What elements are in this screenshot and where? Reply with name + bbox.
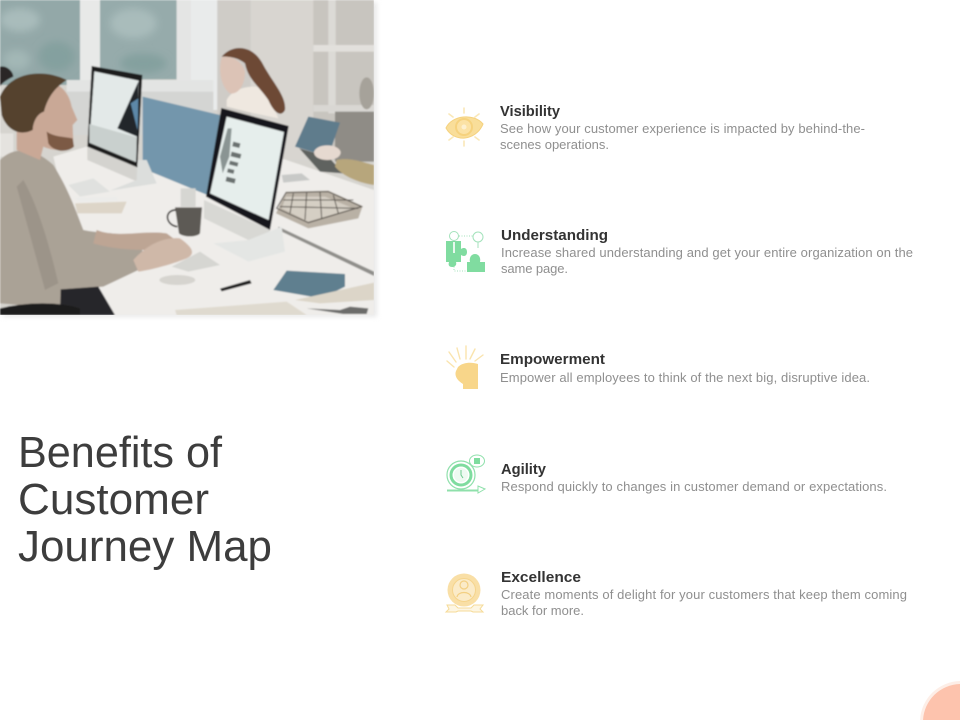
heading: Excellence: Excellence bbox=[501, 570, 581, 586]
right monitor bbox=[206, 108, 289, 230]
description: Understanding bbox=[501, 245, 913, 276]
right monitor stand bbox=[204, 200, 270, 240]
icon: award badge with ribbon bbox=[446, 574, 483, 612]
monitor left bbox=[87, 147, 137, 182]
description: Excellence: back for more. bbox=[501, 603, 584, 618]
heading: Understanding: Understanding bbox=[501, 228, 608, 244]
man's trousers and chair bbox=[60, 287, 115, 315]
desk surfaces bbox=[53, 147, 374, 315]
title: Customer bbox=[18, 475, 209, 524]
heading: Agility: Agility bbox=[501, 462, 546, 478]
man's torso bbox=[0, 151, 143, 308]
icon: raised fist with rays bbox=[447, 346, 483, 389]
description: Visibility: See how your customer experience is impacted by behind-the- bbox=[500, 121, 865, 136]
description: Excellence bbox=[501, 587, 907, 618]
man's head bbox=[17, 82, 77, 160]
icon: puzzle pieces with person and light bulb bbox=[446, 232, 485, 272]
decorative corner circle bbox=[920, 681, 960, 720]
description: Empowerment: Empower all employees to think of the next big, disruptive idea. bbox=[500, 370, 870, 385]
item: Visibility bbox=[446, 104, 865, 152]
left keyboard and notebooks bbox=[70, 179, 108, 196]
item: Understanding bbox=[446, 228, 913, 276]
title: Journey Map bbox=[18, 522, 272, 571]
item: Empowerment bbox=[447, 346, 870, 389]
desk items: pen, notebook, paper bbox=[220, 280, 252, 291]
description: Excellence: Create moments of delight for your customers that keep them coming bbox=[501, 587, 907, 602]
heading: Visibility: Visibility bbox=[500, 104, 560, 120]
title bbox=[18, 428, 272, 571]
arms and hand bbox=[93, 230, 173, 250]
heading: Empowerment: Empowerment bbox=[500, 352, 605, 368]
item: Excellence bbox=[446, 570, 907, 618]
description: Agility: Respond quickly to changes in customer demand or expectations. bbox=[501, 479, 887, 494]
blue partition bbox=[143, 97, 220, 195]
description: Understanding: same page. bbox=[501, 261, 568, 276]
description: Visibility: scenes operations. bbox=[500, 137, 609, 152]
title: Benefits of bbox=[18, 428, 223, 477]
tablet and right person bbox=[295, 117, 340, 157]
wire basket bbox=[276, 191, 363, 228]
item: Agility bbox=[447, 455, 887, 494]
description: Understanding: Increase shared understanding and get your entire organization on the bbox=[501, 245, 913, 260]
description: Visibility bbox=[500, 121, 865, 152]
woman in background bbox=[227, 87, 278, 118]
photo: office workers at computer desks bbox=[0, 0, 377, 317]
mug bbox=[181, 188, 196, 207]
icon: clock with arrow and speech bubble bbox=[447, 455, 485, 493]
icon: eye with rays bbox=[446, 108, 483, 146]
keyboard and mouse bbox=[172, 252, 220, 272]
